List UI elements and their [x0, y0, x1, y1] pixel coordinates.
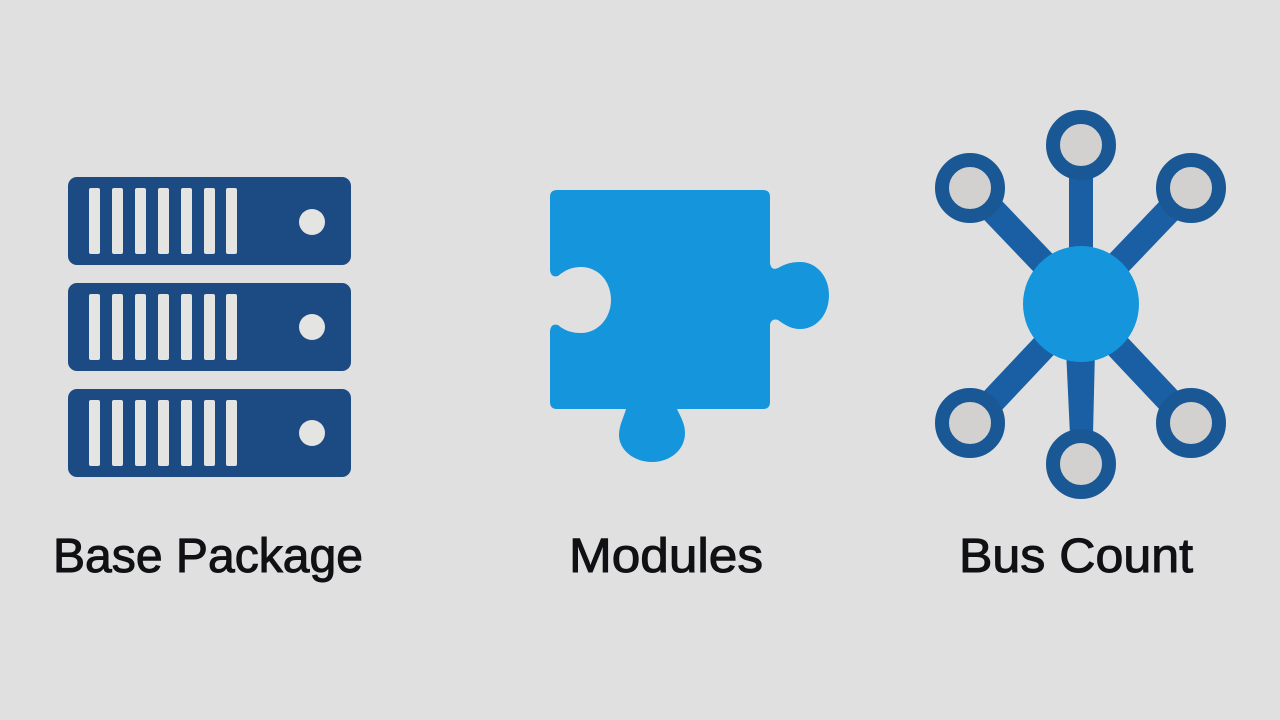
label: Base Package: Base Package — [53, 530, 363, 583]
label: Modules: Modules — [569, 530, 763, 583]
icon: server stack — [68, 177, 351, 477]
label: Bus Count: Bus Count — [959, 530, 1193, 583]
icon: puzzle piece — [550, 190, 829, 462]
icon: bus network hub — [942, 117, 1219, 492]
